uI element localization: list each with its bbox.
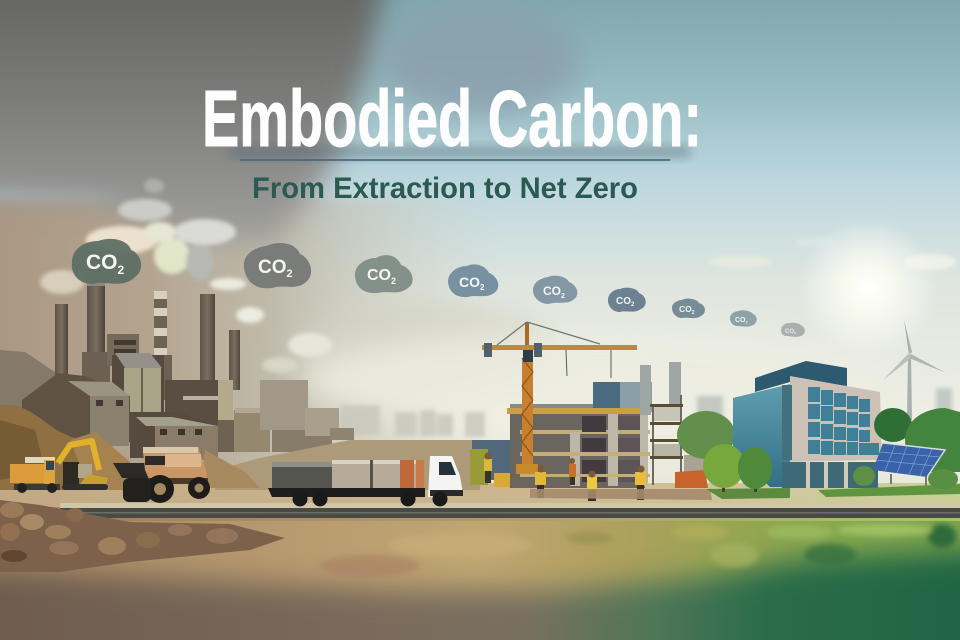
stone facade [782, 376, 882, 487]
far plant block [260, 380, 354, 452]
CO2 cloud 3: 2 [391, 276, 396, 286]
title rule [240, 159, 670, 161]
right plant block [130, 380, 233, 460]
ground floor columns [806, 462, 848, 488]
truck cab [428, 456, 463, 497]
entrance glass [782, 462, 878, 488]
lower plant block [218, 408, 270, 452]
CO2 cloud 5: CO [543, 284, 561, 298]
scaffolding [640, 362, 706, 485]
foreground rubble [0, 500, 285, 572]
worker 2 [535, 466, 546, 498]
yellow loader [470, 449, 488, 485]
dump truck [113, 447, 210, 503]
far ground band [215, 440, 480, 490]
sun glow [798, 218, 938, 358]
CO2 cloud 1: 2 [118, 263, 124, 277]
ground [0, 483, 960, 640]
factory chimney 5 [229, 330, 240, 390]
green building [677, 361, 882, 488]
left warehouse [22, 373, 130, 446]
truck bed [268, 488, 425, 497]
CO2 cloud 9: CO [785, 329, 794, 335]
construction site [470, 322, 712, 501]
worker 3 [569, 458, 576, 485]
CO2 cloud 9: 2 [794, 331, 796, 335]
title shadow band [230, 146, 690, 158]
solar panel [873, 443, 945, 486]
foreground grass [320, 524, 956, 577]
orange container [675, 470, 708, 488]
tipper truck [10, 457, 60, 493]
CO2 cloud 7: CO [679, 304, 692, 314]
CO2 cloud 1: CO [86, 251, 118, 274]
CO2 cloud 7: 2 [692, 310, 695, 316]
distant city skyline [340, 388, 952, 437]
foreground trees [703, 444, 958, 492]
CO2 cloud 3: CO [367, 267, 391, 284]
truck wheels [292, 492, 448, 506]
CO2 cloud 2 [244, 243, 311, 288]
factory chimney 4 [200, 294, 215, 384]
flatbed truck [268, 456, 463, 506]
right trees [874, 408, 960, 472]
window grid [808, 387, 879, 455]
CO2 cloud 2: 2 [286, 268, 293, 280]
tower block [107, 334, 139, 366]
road [60, 503, 960, 521]
factory chimney 3 striped [154, 291, 172, 400]
lower ground shadow [0, 533, 960, 640]
CO2 cloud 8: CO [735, 317, 746, 324]
CO2 cloud 4: 2 [480, 283, 485, 292]
factory chimney 2 [82, 278, 110, 384]
tower crane [482, 322, 637, 474]
CO2 cloud 8: 2 [746, 320, 748, 324]
distant hills [0, 350, 60, 470]
CO2 cloud 4: CO [459, 274, 480, 290]
CO2 cloud 5: 2 [561, 293, 565, 300]
glass wing [733, 384, 790, 487]
site plinth [530, 489, 712, 500]
CO2 cloud 5 [533, 276, 577, 304]
CO2 cloud 3 [355, 255, 413, 293]
truck cargo [272, 460, 424, 488]
CO2 cloud 1 [72, 239, 141, 284]
top storey [755, 361, 847, 392]
low teal shed [472, 440, 512, 480]
worker 1 [484, 452, 492, 483]
worker 5 [635, 466, 646, 500]
CO2 cloud 4 [448, 264, 498, 297]
CO2 cloud 8 [730, 310, 757, 327]
CO2 cloud 6: 2 [631, 302, 635, 308]
rock mound left [0, 405, 260, 490]
CO2 cloud 7 [672, 299, 705, 318]
tree behind [677, 411, 735, 459]
excavator [58, 441, 108, 490]
CO2 cloud 2: CO [258, 257, 286, 278]
subtitle: From Extraction to Net Zero [252, 172, 638, 205]
building frame [507, 382, 652, 488]
material pallet [494, 473, 510, 487]
window strip [782, 385, 792, 460]
panel: factory [22, 278, 354, 460]
CO2 cloud 6 [608, 288, 646, 312]
smoke plumes [40, 179, 332, 373]
worker 4 [587, 470, 597, 501]
title: Embodied Carbon: [202, 74, 702, 163]
CO2 cloud 6: CO [616, 296, 631, 307]
factory chimney 1 [55, 304, 68, 379]
CO2 cloud 9 [781, 323, 805, 337]
mid building [112, 353, 164, 420]
lawn [706, 484, 960, 499]
wind turbine [882, 320, 946, 420]
